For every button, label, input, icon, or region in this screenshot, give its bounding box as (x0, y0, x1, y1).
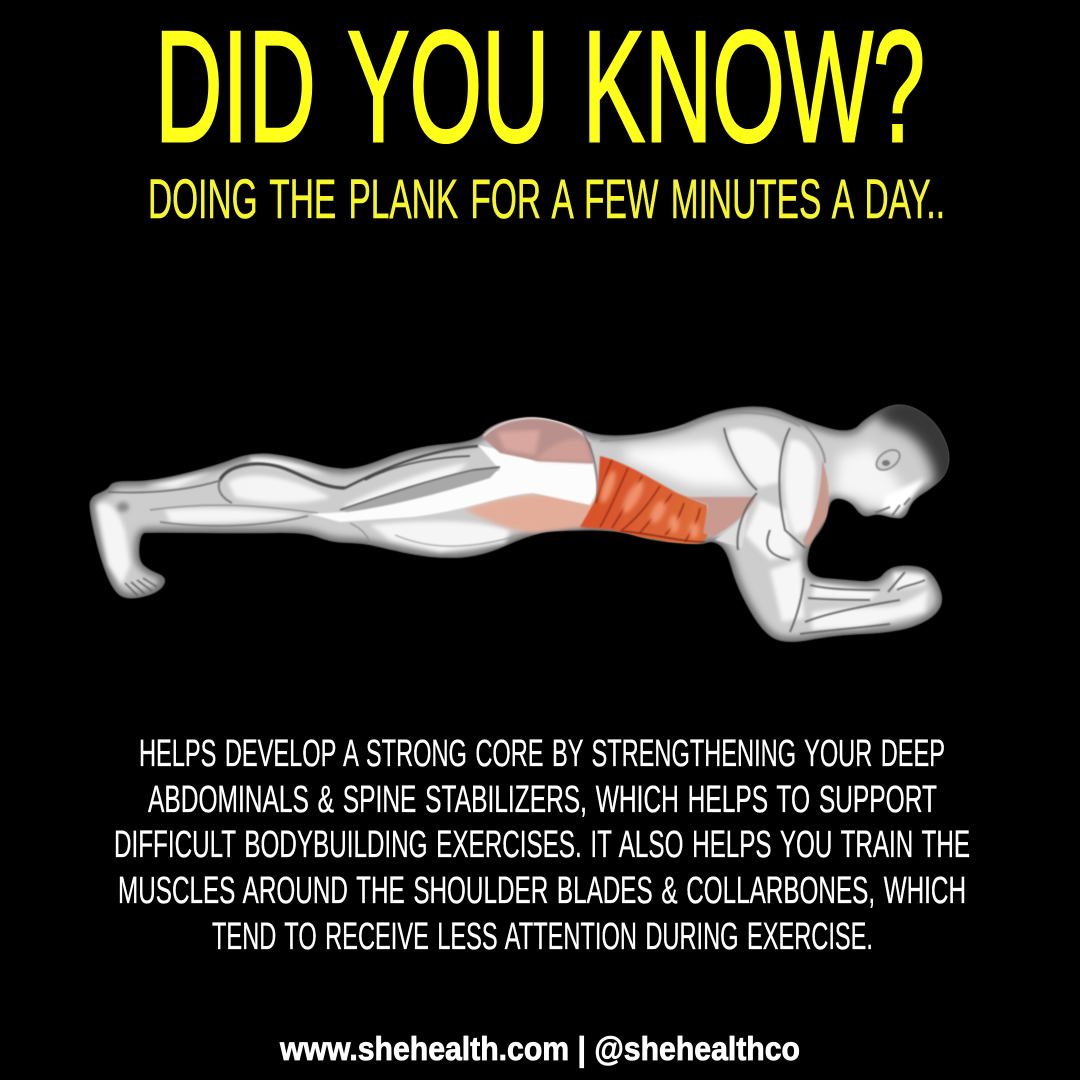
face features (875, 498, 910, 516)
calf spot at ankle (117, 502, 129, 512)
quad pink (465, 494, 595, 533)
hamstring panel edge (340, 467, 500, 510)
illustration: plank figure with highlighted core muscles (90, 395, 962, 642)
footer: www.shehealth.com | @shehealthco (279, 1030, 800, 1067)
toe lines (125, 578, 157, 596)
oblique highlights (597, 469, 699, 538)
glute light rim (484, 418, 590, 442)
inner ear (882, 460, 890, 466)
lat edge (600, 413, 800, 441)
leg grooves (108, 446, 520, 546)
neck and face light (835, 445, 905, 510)
body text (114, 733, 970, 958)
glute lower pink (535, 439, 592, 462)
hair (872, 405, 949, 486)
IT band white (310, 445, 598, 522)
shoulder and arm highlights (727, 428, 928, 630)
oblique striations (596, 460, 705, 542)
face lower light (882, 478, 925, 515)
ear (874, 448, 902, 472)
body silhouette (90, 405, 949, 642)
leg highlights (97, 458, 510, 585)
glute left pink (497, 430, 540, 455)
rim shading (90, 405, 949, 642)
arm grooves (724, 420, 925, 634)
hip edge (583, 433, 597, 503)
muscle shading and detail (90, 395, 962, 642)
obliques (580, 456, 708, 545)
pale abdomen patch (686, 497, 756, 537)
rear deltoid pink (803, 460, 829, 547)
hamstring panel grey (340, 467, 500, 512)
glute (482, 417, 594, 463)
abdomen lower white (715, 510, 748, 548)
torso highlight (625, 440, 750, 488)
